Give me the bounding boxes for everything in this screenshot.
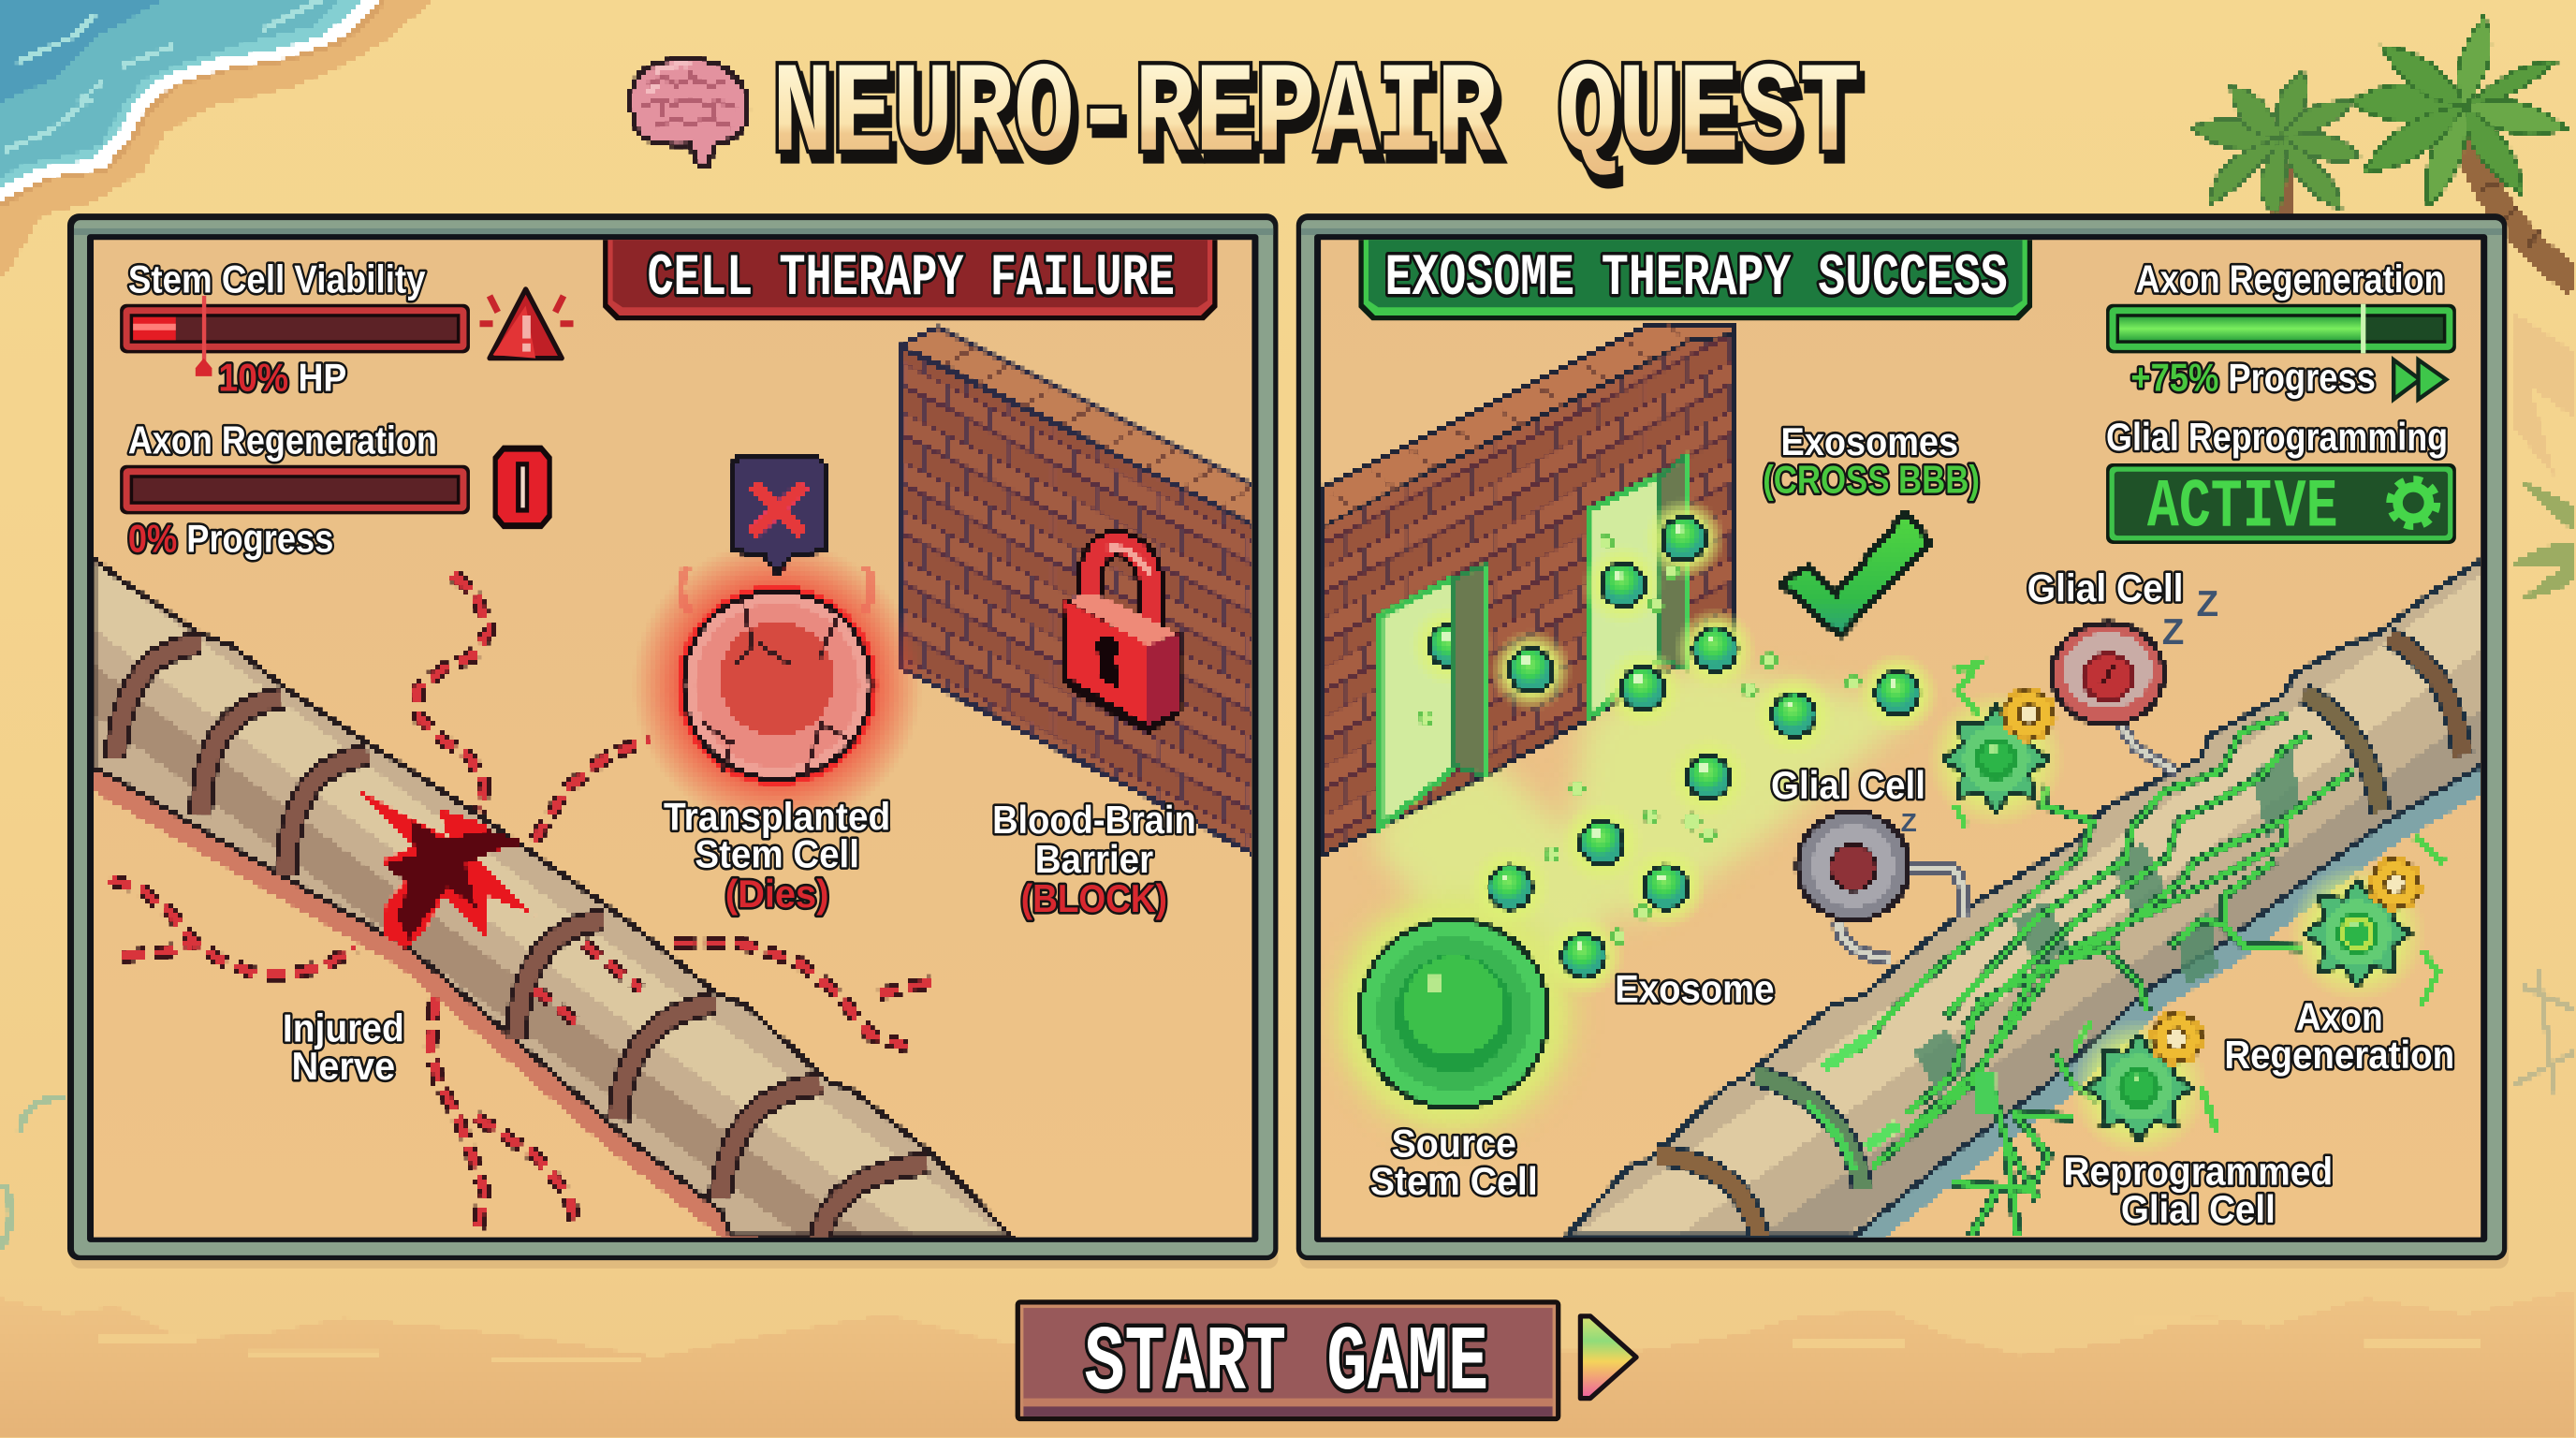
label: glial cell top: Glial Cell [2027, 566, 2184, 609]
illustration: success scene [1321, 324, 2576, 1430]
sleep z top [2162, 584, 2218, 653]
label: source stem cell: Source [1392, 1123, 1516, 1166]
banner: exosome therapy success: EXOSOME THERAPY SUCCESS [1385, 244, 2008, 312]
label: injured nerve: Injured [283, 1007, 404, 1050]
sleep z lower: Z [1901, 808, 1917, 837]
checkmark [1781, 513, 1930, 636]
ground glow [1336, 666, 1922, 1132]
source stem cell [1336, 896, 1573, 1132]
title text: NEURO-REPAIR QUEST [772, 44, 1860, 189]
hud and labels [120, 240, 1218, 1088]
lower darker sand [0, 1290, 2576, 1438]
icon: padlock [1064, 544, 1178, 729]
brick wall with portals [1321, 324, 1734, 856]
banner: cell therapy failure: CELL THERAPY FAILURE [648, 244, 1175, 312]
banner: cell therapy failure [603, 240, 1218, 320]
hud and labels: Regeneration [2224, 1034, 2454, 1077]
portal 2 [1590, 477, 1660, 716]
illustration: failure scene [94, 324, 1251, 1238]
sleep z top: Z [2162, 612, 2184, 653]
hud and labels: Stem Cell [695, 833, 859, 876]
stem cell dying [633, 540, 922, 829]
hud and labels [1358, 240, 2456, 1231]
10 percent hp: 10% HP [218, 357, 346, 400]
hud and labels: (CROSS BBB) [1763, 459, 1980, 502]
panel: cell therapy failure [67, 213, 1279, 1269]
exosomes [1419, 498, 1939, 997]
banner: exosome therapy success [1358, 240, 2032, 320]
icon: play arrow [1580, 1316, 1636, 1399]
axon regeneration progress bar [2106, 304, 2456, 353]
reprogrammed glial cells with gears [1927, 664, 2445, 1157]
plus 75 percent progress: +75% Progress [2130, 357, 2376, 400]
hud and labels: Stem Cell [1370, 1160, 1538, 1203]
panel: exosome therapy success [1296, 213, 2576, 1430]
palm trees [2276, 165, 2289, 222]
glial reprogramming label: Glial Reprogramming [2106, 416, 2448, 459]
sleeping glial cell lower [1797, 812, 1965, 960]
axon regeneration empty bar [120, 465, 470, 514]
label: reprogrammed glial cell: Reprogrammed [2063, 1150, 2333, 1193]
label: blood-brain barrier: Blood-Brain [992, 799, 1196, 842]
start game button [1016, 1299, 1560, 1421]
icon: brain [631, 59, 748, 165]
zero percent progress: 0% Progress [128, 518, 333, 561]
sleep z top: Z [2197, 584, 2218, 624]
panel frame [1296, 213, 2509, 1269]
hud and labels: Nerve [292, 1045, 395, 1088]
label: axon regeneration: Axon [2296, 995, 2383, 1038]
hud and labels: (Dies) [725, 873, 828, 916]
nerve tube regenerating [1486, 507, 2576, 1430]
faint palm at right edge [2510, 479, 2576, 600]
icon: fast forward [2393, 360, 2446, 399]
nerve tube injured [94, 557, 1016, 1238]
stem cell viability label: Stem Cell Viability [128, 257, 426, 301]
hud and labels: (BLOCK) [1021, 877, 1167, 920]
icon: x badge [731, 459, 827, 574]
icon: warning [479, 289, 574, 359]
dashed broken axons [110, 575, 936, 1236]
label: transplanted stem cell: Transplanted [664, 795, 890, 838]
icon: gear [2392, 481, 2435, 524]
panel frame [67, 213, 1278, 1269]
sea [0, 0, 381, 202]
regrown axons [1823, 714, 2352, 1236]
faint shadows and foliage at edges [2513, 312, 2576, 477]
axon regeneration label (failure): Axon Regeneration [128, 418, 437, 462]
active status box: ACTIVE [2147, 470, 2338, 548]
label: exosome: Exosome [1615, 968, 1775, 1011]
wet sand [0, 0, 433, 279]
sleeping glial cell top [2052, 623, 2177, 772]
wound [355, 788, 537, 948]
zero badge [493, 446, 552, 529]
axon regeneration label (success): Axon Regeneration [2136, 257, 2445, 301]
brick wall [900, 327, 1255, 855]
start game button: START GAME [1084, 1312, 1488, 1416]
label: exosomes cross bbb: Exosomes [1781, 420, 1958, 463]
hud and labels: Barrier [1035, 838, 1153, 881]
stem cell viability bar [120, 296, 470, 376]
active status box [2106, 463, 2456, 548]
title [631, 44, 1860, 189]
label: glial cell lower: Glial Cell [1771, 764, 1925, 807]
portal 1 [1380, 579, 1454, 827]
hud and labels: Glial Cell [2121, 1188, 2276, 1231]
